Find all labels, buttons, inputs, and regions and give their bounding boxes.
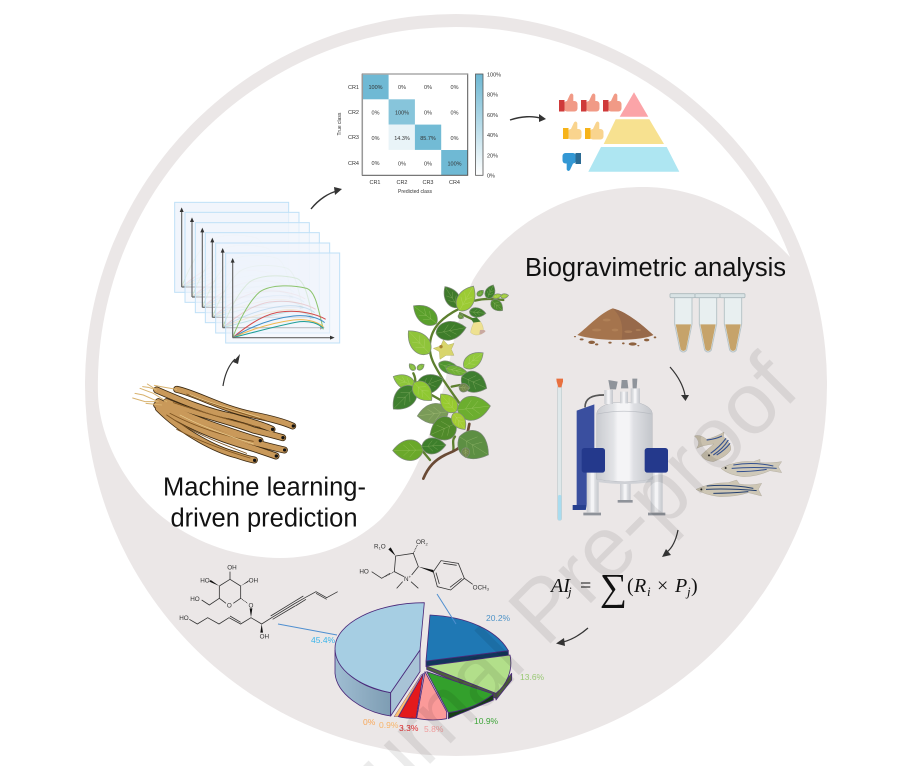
confusion matrix heatmap: 85.7% xyxy=(420,136,436,142)
plant star flower xyxy=(433,340,454,359)
pyramid bottom tier xyxy=(588,147,679,172)
molecule: pyrrolidinium alkaloid: + xyxy=(409,575,412,580)
zebrafish 3 xyxy=(696,480,762,497)
arrow: soil to fish xyxy=(670,367,689,401)
plant illustration xyxy=(386,282,509,479)
molecule: pyrrolidinium alkaloid: 2 xyxy=(425,541,428,546)
NMR spectrometer xyxy=(556,379,668,520)
plot layer 2 xyxy=(185,212,299,302)
confusion matrix heatmap: 100% xyxy=(447,162,462,168)
molecule: pyrrolidinium alkaloid: 1 xyxy=(379,546,382,551)
background circle: grey yin-yang disc xyxy=(85,14,827,756)
soil pile xyxy=(574,308,656,346)
pie side: 10.9% slice xyxy=(448,695,493,719)
confusion matrix heatmap: 0% xyxy=(424,110,432,116)
NMR sample tube xyxy=(556,379,563,520)
tube 1 xyxy=(670,294,695,352)
NMR legs xyxy=(587,472,599,512)
pie percentage labels: 10.9% xyxy=(474,716,499,726)
confusion matrix heatmap: 60% xyxy=(487,113,498,119)
pie slice: 5.8% xyxy=(417,672,447,720)
plant woody stem xyxy=(423,424,469,479)
molecule: pyrrolidinium alkaloid: R xyxy=(374,543,379,550)
confusion matrix heatmap: Predicted class xyxy=(398,189,432,195)
molecule: pyrrolidinium alkaloid: 3 xyxy=(487,587,490,592)
pie slice: 45.4% xyxy=(335,603,424,693)
activity index formula: = xyxy=(580,575,591,597)
plant bud xyxy=(471,320,483,335)
confusion matrix heatmap: CR3 xyxy=(348,135,359,141)
confusion matrix heatmap: 0% xyxy=(487,174,495,180)
confusion matrix heatmap: 100% xyxy=(368,85,383,91)
pie percentage labels: 45.4% xyxy=(311,635,336,645)
NMR blue back panel xyxy=(577,404,594,510)
pie slice: 13.6% xyxy=(427,655,511,693)
plant stems xyxy=(413,299,503,460)
thumb down blue xyxy=(562,153,581,171)
activity index formula: R xyxy=(633,575,646,597)
pie slice: 10.9% xyxy=(427,672,493,713)
herb roots illustration xyxy=(133,384,295,462)
arrow: plots to matrix xyxy=(311,187,342,209)
pie slice: 3.3% xyxy=(398,673,423,718)
thumbs up red xyxy=(559,93,622,112)
white yin-yang lobe xyxy=(98,27,790,558)
plot layer 1 xyxy=(175,202,289,292)
tube 3 xyxy=(720,294,745,352)
molecule: pyrrolidinium alkaloid: OCH xyxy=(473,584,487,591)
confusion matrix heatmap xyxy=(337,72,501,195)
confusion matrix heatmap: 0% xyxy=(451,85,459,91)
molecule: pyrrolidinium alkaloid: OR xyxy=(416,539,425,546)
confusion matrix heatmap: CR2 xyxy=(348,110,359,116)
confusion matrix heatmap: 0% xyxy=(424,85,432,91)
pie percentage labels: 0.9% xyxy=(379,720,399,730)
molecule: glycoside polyacetylene: OH xyxy=(227,564,237,571)
confusion matrix heatmap: CR1 xyxy=(369,180,381,186)
activity index formula: AI xyxy=(549,575,571,597)
plot layer 3 xyxy=(195,223,309,313)
stacked spectral plots xyxy=(175,202,340,343)
pie side: large light blue slice xyxy=(335,650,391,716)
zebrafish 2 xyxy=(721,459,782,477)
activity index formula: i xyxy=(647,584,651,599)
pie percentage labels: 0% xyxy=(363,717,376,727)
tube 2 xyxy=(695,294,720,352)
molecule: pyrrolidinium alkaloid: N xyxy=(404,576,409,583)
activity index formula: ∑ xyxy=(600,567,627,609)
confusion matrix heatmap: True class xyxy=(337,112,343,135)
plot layer 6 front xyxy=(226,253,340,343)
pie side: 20.2% slice xyxy=(426,651,508,667)
activity index formula: ) xyxy=(691,575,698,597)
heading: Machine learning-driven prediction: driven prediction xyxy=(170,504,358,532)
pie slice: 0.9% xyxy=(394,674,422,717)
plot layer 5 xyxy=(216,243,330,333)
pie percentage labels xyxy=(311,613,545,734)
activity index formula: P xyxy=(674,575,687,597)
confusion matrix heatmap: 0% xyxy=(451,136,459,142)
confusion matrix heatmap: 0% xyxy=(451,110,459,116)
pie percentage labels: 3.3% xyxy=(399,723,419,733)
molecule: glycoside polyacetylene: HO xyxy=(200,578,210,585)
activity index formula xyxy=(549,567,698,609)
molecule: pyrrolidinium alkaloid xyxy=(359,539,490,592)
activity index formula: j xyxy=(685,584,691,599)
molecule: pyrrolidinium alkaloid: O xyxy=(381,543,386,550)
confusion matrix heatmap: 0% xyxy=(398,85,406,91)
molecule: glycoside polyacetylene: HO xyxy=(190,596,200,603)
heading: Machine learning-driven prediction xyxy=(163,474,366,532)
confusion matrix heatmap: 14.3% xyxy=(394,136,410,142)
molecule: glycoside polyacetylene xyxy=(179,564,338,640)
pyramid top tier xyxy=(620,92,648,117)
confusion matrix heatmap: 0% xyxy=(372,161,380,167)
pie side: 13.6% slice xyxy=(427,666,512,700)
confusion matrix heatmap: 20% xyxy=(487,154,498,160)
pyramid middle tier xyxy=(604,119,664,144)
confusion matrix heatmap: CR3 xyxy=(422,180,434,186)
leader line to 45.4% slice xyxy=(278,624,337,635)
NMR hose xyxy=(585,395,604,407)
zebrafish group xyxy=(694,432,782,497)
molecule: glycoside polyacetylene: O xyxy=(227,602,232,609)
confusion matrix heatmap: CR2 xyxy=(396,180,408,186)
molecule: glycoside polyacetylene: OH xyxy=(260,633,270,640)
confusion matrix heatmap: 40% xyxy=(487,133,498,139)
NMR blue boxes xyxy=(582,448,605,473)
molecule: pyrrolidinium alkaloid: HO xyxy=(359,568,369,575)
heading: Machine learning-driven prediction: Machine learning- xyxy=(163,474,366,502)
zebrafish 1 xyxy=(694,432,731,462)
sample tubes xyxy=(670,294,745,352)
plant leaves xyxy=(386,282,509,467)
confusion matrix heatmap: 100% xyxy=(395,110,409,116)
leader line to 20.2% slice xyxy=(437,594,456,624)
plot layer 4 xyxy=(205,233,319,323)
confusion matrix heatmap: 0% xyxy=(424,162,432,168)
pie percentage labels: 13.6% xyxy=(520,672,545,682)
confusion matrix heatmap: CR4 xyxy=(449,180,460,186)
heading: Biogravimetric analysis: Biogravimetric analysis xyxy=(525,254,786,282)
pie slice: 20.2% xyxy=(426,615,508,661)
arrow: roots to plots xyxy=(223,354,240,386)
arrow: matrix to pyramid xyxy=(510,114,546,122)
NMR top turrets xyxy=(604,390,613,404)
molecule: glycoside polyacetylene: HO xyxy=(179,615,189,622)
confusion matrix heatmap: CR4 xyxy=(348,161,359,167)
pie percentage labels: 5.8% xyxy=(424,724,444,734)
confusion matrix heatmap: 0% xyxy=(398,162,406,168)
activity index formula: × xyxy=(657,575,668,597)
NMR main cylinder xyxy=(597,403,652,482)
3D pie chart xyxy=(335,603,512,720)
confusion matrix heatmap: 0% xyxy=(372,136,380,142)
confusion matrix heatmap: 80% xyxy=(487,92,498,98)
pyramid rating with thumbs xyxy=(559,92,679,172)
pie percentage labels: 20.2% xyxy=(486,613,511,623)
molecule: glycoside polyacetylene: OH xyxy=(249,578,259,585)
confusion matrix heatmap: 0% xyxy=(372,110,380,116)
confusion matrix heatmap: CR1 xyxy=(348,85,359,91)
arrow: fish to formula xyxy=(662,530,678,557)
activity index formula: j xyxy=(566,584,572,599)
arrow: formula to pie xyxy=(556,628,588,646)
confusion matrix heatmap: 100% xyxy=(487,72,501,78)
molecule: glycoside polyacetylene: O xyxy=(249,602,254,609)
thumbs up yellow xyxy=(563,121,604,140)
activity index formula: ( xyxy=(627,575,634,597)
